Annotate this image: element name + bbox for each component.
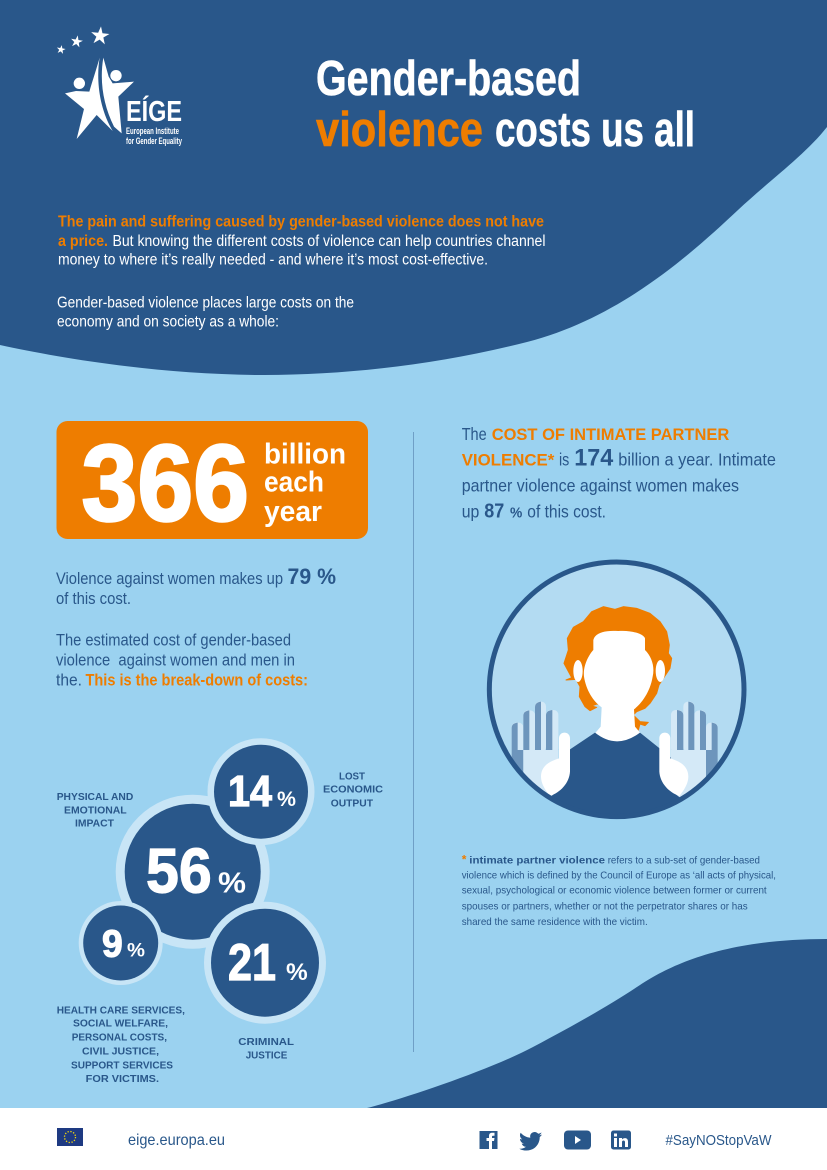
text block: break-down introduction: violence against women and men in bbox=[56, 652, 295, 670]
text block: break-down introduction: The estimated cost of gender-based bbox=[56, 632, 291, 650]
text block: cost of intimate partner violence bbox=[462, 424, 776, 523]
text block: cost of intimate partner violence: of this cost. bbox=[527, 502, 606, 522]
shirt bbox=[552, 732, 680, 814]
label: health care and services: SOCIAL WELFARE, bbox=[73, 1018, 168, 1030]
text block: cost of intimate partner violence: up bbox=[462, 502, 479, 522]
text block: footnote definition: shared the same residence with the victim. bbox=[462, 916, 648, 928]
text block: footnote definition: spouses or partners, whether or not the perpetrator shares or has bbox=[462, 901, 748, 913]
callout: 366 billion each year: 366 bbox=[82, 422, 249, 544]
text block: women share of cost: of this cost. bbox=[56, 590, 131, 608]
label: health care and services: FOR VICTIMS. bbox=[86, 1073, 159, 1085]
panel: header background bbox=[0, 0, 827, 375]
label: criminal justice: CRIMINAL bbox=[238, 1036, 295, 1048]
bubble: 56 percent: 56 bbox=[146, 837, 212, 907]
label: health care and services: PERSONAL COSTS, bbox=[72, 1032, 167, 1044]
text block: introduction: a price. bbox=[58, 233, 108, 250]
text block: cost of intimate partner violence: partner violence against women makes bbox=[462, 476, 739, 496]
icon: twitter bbox=[519, 1132, 542, 1150]
text block: break-down introduction bbox=[56, 632, 308, 689]
panel: bottom wave bbox=[367, 939, 827, 1108]
text block: footnote definition bbox=[462, 852, 776, 928]
label: criminal justice bbox=[238, 1036, 295, 1061]
text block: introduction: Gender-based violence places large costs on the bbox=[57, 295, 354, 312]
bubble: 14 percent: 14 bbox=[228, 767, 272, 816]
icon: EIGE logo: EÍGE bbox=[126, 94, 182, 128]
label: lost economic output: LOST bbox=[339, 770, 366, 782]
bubble: 9 percent: 9 bbox=[102, 924, 123, 966]
text block: women share of cost bbox=[56, 564, 336, 608]
icon: facebook bbox=[480, 1131, 498, 1149]
text block: women share of cost: Violence against women makes up bbox=[56, 570, 283, 588]
text block: footnote definition: refers to a sub-set of gender-based bbox=[608, 854, 760, 866]
label: health care and services: SUPPORT SERVICES bbox=[71, 1059, 173, 1071]
label: physical and emotional impact: EMOTIONAL bbox=[64, 804, 127, 816]
label: lost economic output: OUTPUT bbox=[331, 798, 374, 810]
text block: break-down introduction: the. bbox=[56, 671, 82, 689]
icon: EIGE logo bbox=[56, 25, 182, 146]
label: criminal justice: JUSTICE bbox=[246, 1049, 287, 1061]
right hands bbox=[659, 702, 718, 798]
title: violence bbox=[316, 103, 483, 157]
text: hashtag: #SayNOStopVaW bbox=[666, 1132, 772, 1149]
illustration: woman raising hands bbox=[486, 560, 746, 820]
icon: EU flag bbox=[57, 1128, 83, 1146]
left hands bbox=[512, 702, 570, 796]
text block: cost of intimate partner violence: 174 bbox=[574, 445, 614, 472]
text block: cost of intimate partner violence: COST OF INTIMATE PARTNER bbox=[492, 425, 729, 444]
label: physical and emotional impact: PHYSICAL AND bbox=[57, 791, 134, 803]
bubble: 56 percent: % bbox=[218, 868, 246, 900]
label: lost economic output: ECONOMIC bbox=[323, 784, 383, 796]
text block: women share of cost: 79 % bbox=[288, 564, 336, 589]
text block: cost of intimate partner violence: billion a year. Intimate bbox=[618, 450, 776, 470]
text block: cost of intimate partner violence: The bbox=[462, 424, 487, 444]
panel: footer background bbox=[0, 1108, 827, 1170]
text block: cost of intimate partner violence: is bbox=[559, 450, 570, 470]
label: lost economic output bbox=[323, 770, 383, 810]
text block: footnote definition: sexual, psychological or economic violence between former or current bbox=[462, 885, 767, 897]
label: physical and emotional impact bbox=[57, 791, 134, 830]
text block: footnote definition: violence which is defined by the Council of Europe as ‘all acts of physical, bbox=[462, 869, 776, 881]
bubble: 21 percent bbox=[204, 902, 326, 1024]
label: health care and services bbox=[57, 1004, 185, 1085]
text block: introduction bbox=[57, 214, 546, 331]
title: costs us all bbox=[495, 103, 695, 157]
bubble: 21 percent: % bbox=[286, 959, 308, 986]
text block: introduction: The pain and suffering caused by gender-based violence does not have bbox=[58, 214, 544, 231]
label: health care and services: HEALTH CARE SERVICES, bbox=[57, 1004, 185, 1016]
label: health care and services: CIVIL JUSTICE, bbox=[82, 1046, 159, 1058]
text block: cost of intimate partner violence: VIOLENCE* bbox=[462, 451, 555, 470]
callout: 366 billion each year: each bbox=[264, 467, 324, 499]
title: Gender-based bbox=[316, 52, 581, 106]
bubble: 14 percent: % bbox=[277, 788, 296, 811]
text: website: eige.europa.eu bbox=[128, 1132, 225, 1149]
text block: introduction: economy and on society as a whole: bbox=[57, 314, 279, 331]
bubble: 14 percent bbox=[208, 738, 314, 845]
icon: EIGE logo: European Institute bbox=[126, 126, 179, 136]
label: physical and emotional impact: IMPACT bbox=[75, 818, 115, 830]
text block: footnote definition: * bbox=[462, 852, 467, 866]
callout: 366 billion each year bbox=[56, 421, 368, 544]
text block: introduction: But knowing the different costs of violence can help countries channel bbox=[112, 233, 546, 250]
title bbox=[316, 52, 695, 157]
chart: cost break-down bubbles bbox=[57, 738, 383, 1085]
text block: introduction: money to where it’s really needed - and where it’s most cost-effective. bbox=[58, 252, 488, 268]
icon: linkedin bbox=[611, 1130, 631, 1150]
hair bbox=[564, 607, 672, 730]
text block: footnote definition: intimate partner violence bbox=[469, 854, 605, 866]
bubble: 9 percent bbox=[79, 901, 163, 985]
callout: 366 billion each year: billion bbox=[264, 438, 346, 470]
bubble: 21 percent: 21 bbox=[228, 934, 276, 992]
bubble: 56 percent bbox=[116, 795, 270, 949]
bubble: 9 percent: % bbox=[127, 941, 145, 962]
text block: break-down introduction: This is the break-down of costs: bbox=[86, 671, 308, 689]
text block: cost of intimate partner violence: 87 bbox=[484, 501, 504, 523]
icon: youtube bbox=[564, 1130, 591, 1150]
text block: cost of intimate partner violence: % bbox=[510, 505, 522, 522]
icon: EIGE logo: for Gender Equality bbox=[126, 136, 182, 146]
callout: 366 billion each year: year bbox=[264, 496, 322, 528]
head and neck bbox=[584, 631, 653, 747]
